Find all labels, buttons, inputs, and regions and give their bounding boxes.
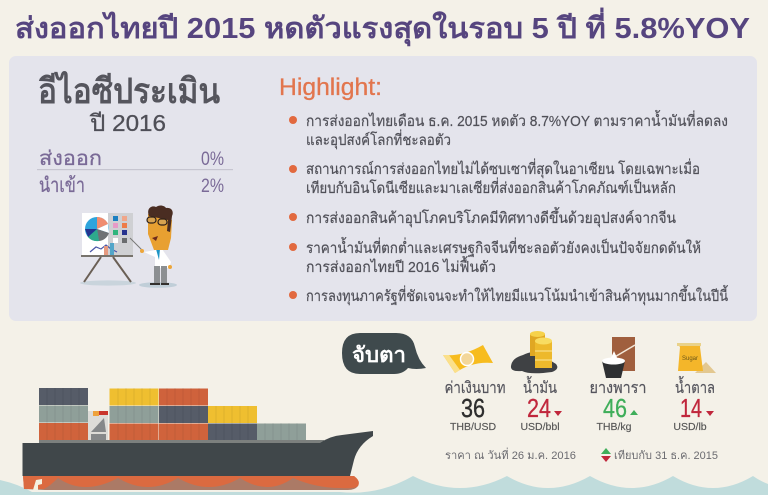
heading: EIC forecast: อีไอซีประเมิน [38,70,220,111]
bullet 3: การส่งออกสินค้าอุปโภคบริโภคมีทิศทางดีขึ้นด้วยอุปสงค์จากจีน [306,207,676,228]
commodity: oil [511,331,562,433]
icon: oil barrels [511,331,557,373]
forecast row: imports [39,175,224,197]
deck [39,440,324,444]
icon: rubber tree and bucket [602,337,635,378]
commodity: baht: 36 [461,393,485,423]
commodity: oil: น้ำมัน [523,376,557,397]
note: price date: ราคา ณ วันที่ 26 ม.ค. 2016 [445,447,576,462]
commodity: baht: THB/USD [450,421,496,433]
keel [23,476,359,490]
commodity: sugar [673,343,716,433]
icon: baht banknote [443,345,493,373]
heading: Highlight: Highlight: [279,74,382,101]
callout: watch [342,333,426,374]
ship bridge [88,411,108,443]
bullet 4 [289,237,701,276]
panel: highlights [279,74,728,306]
forecast row: imports: นำเข้า [39,175,85,197]
bullet 4: การส่งออกไทยปี 2016 ไม่ฟื้นตัว [306,256,496,276]
commodity: oil: USD/bbl [520,421,560,433]
bullet 1: การส่งออกไทยเดือน ธ.ค. 2015 หดตัว 8.7%YOY ตามราคาน้ำมันที่ลดลง [306,110,728,130]
commodity: sugar: 14 [680,393,702,423]
bullet 2: เทียบกับอินโดนีเซียและมาเลเซียที่ส่งออกสินค้าโภคภัณฑ์เป็นหลัก [306,177,676,197]
title: ส่งออกไทยปี 2015 หดตัวแรงสุดในรอบ 5 ปี ที่ 5.8%YOY [15,7,750,46]
commodity: rubber: 46 [603,393,627,423]
bullet 2: สถานการณ์การส่งออกไทยไม่ได้ซบเซาที่สุดในอาเซียน โดยเฉพาะเมื่อ [306,158,700,179]
illustration: cargo ship [22,388,373,490]
commodity: oil: 24 [527,393,551,423]
sea waves [0,476,768,495]
forecast row: exports: ส่งออก [39,148,102,170]
commodity: baht [443,345,506,433]
containers [39,388,306,440]
forecast row: exports [39,148,224,170]
icon: presenter with chart board [80,205,177,288]
commodity: rubber: THB/kg [596,421,632,433]
bullet 1 [289,110,728,150]
callout: watch: จับตา [352,344,406,367]
icon: up and down arrows [601,448,611,462]
forecast row: imports: 2% [201,176,224,197]
commodity: sugar: USD/lb [673,421,707,433]
panel: EIC forecast [37,70,233,288]
bullet 1: และอุปสงค์โลกที่ชะลอตัว [306,129,451,150]
commodity: baht: ค่าเงินบาท [444,380,506,397]
heading: year: ปี 2016 [89,110,166,136]
commodity: rubber: ยางพารา [590,380,646,397]
hull [22,431,373,476]
icon: sugar bag: Sugar [682,356,698,362]
commodity: rubber [590,337,646,433]
bullet 4: ราคาน้ำมันที่ตกต่ำและเศรษฐกิจจีนที่ชะลอตัวยังคงเป็นปัจจัยกดดันให้ [306,237,701,257]
commodity: sugar: น้ำตาล [675,376,715,397]
note: comparison date: เทียบกับ 31 ธ.ค. 2015 [614,449,718,462]
forecast row: exports: 0% [201,149,224,170]
bullet 2 [289,158,700,197]
panel: summary background [9,56,757,321]
